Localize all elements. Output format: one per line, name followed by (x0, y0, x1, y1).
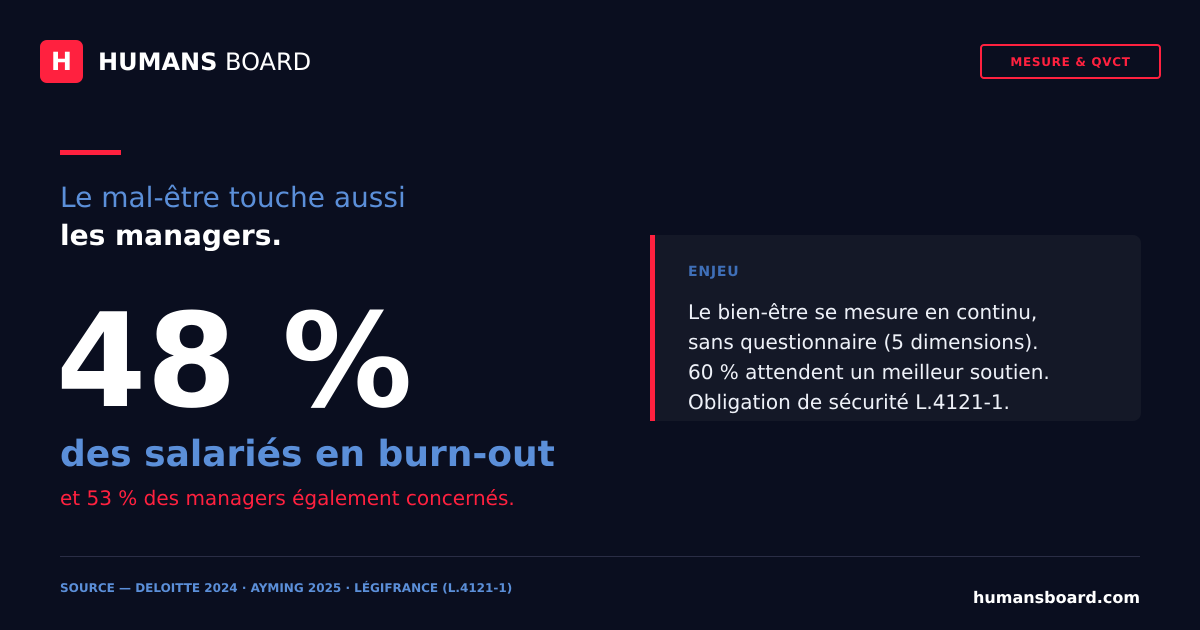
heading: Le mal-être touche aussi (60, 181, 406, 214)
website: humansboard.com (973, 588, 1140, 607)
badge: category: MESURE & QVCT (1010, 55, 1131, 69)
big statistic: 48 % (56, 285, 412, 437)
panel text: Obligation de sécurité L.4121-1. (688, 390, 1010, 414)
heading (60, 181, 406, 252)
panel text: Le bien-être se mesure en continu, (688, 300, 1037, 324)
accent bar (60, 150, 121, 155)
panel text (688, 300, 1050, 414)
source: SOURCE — DELOITTE 2024 · AYMING 2025 · LÉGIFRANCE (L.4121-1) (60, 581, 512, 595)
logo (40, 40, 311, 83)
stat note: et 53 % des managers également concernés. (60, 486, 515, 510)
badge: category (980, 44, 1161, 79)
panel text: sans questionnaire (5 dimensions). (688, 330, 1039, 354)
panel: enjeu (650, 235, 1141, 421)
panel text: 60 % attendent un meilleur soutien. (688, 360, 1050, 384)
panel accent bar (650, 235, 655, 421)
brand name: HUMANS BOARD (98, 48, 311, 76)
icon: H badge: H (51, 47, 72, 76)
stat label: des salariés en burn-out (60, 434, 555, 475)
heading: les managers. (60, 219, 282, 252)
panel heading: ENJEU (688, 264, 739, 280)
icon: H badge (40, 40, 83, 83)
